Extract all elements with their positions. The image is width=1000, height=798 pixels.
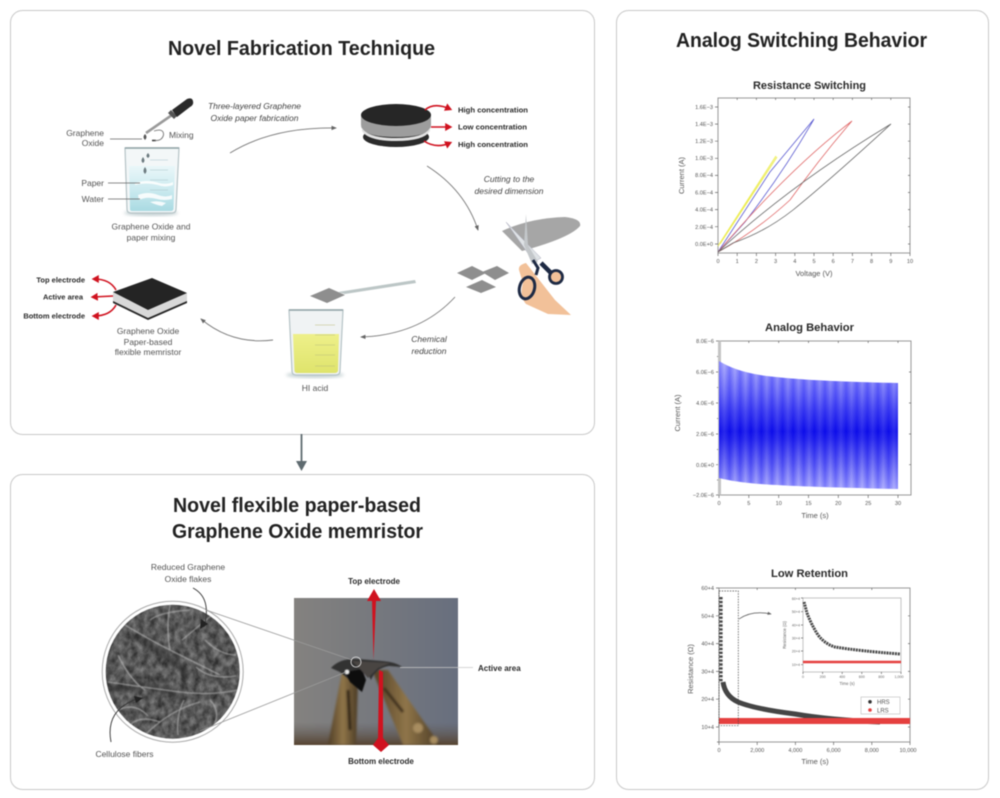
arrows: disc concentration [424,106,450,146]
step label: cutting: desired dimension [475,186,544,196]
step label: cutting [475,174,544,196]
caption: HI acid: HI acid [302,383,328,393]
inset y labels: 20+4 [792,650,800,654]
panel: fabrication technique [10,10,594,434]
legend: HRS [877,700,890,706]
icon: tweezers with square [310,280,416,303]
axis labels [673,394,829,520]
x tick labels: 3 [774,259,777,265]
caption: mixing [112,222,191,242]
caption: memristor: flexible memristor [115,347,181,357]
x tick labels: 20 [835,501,841,507]
labels: concentration: High concentration [458,140,528,149]
chart: analog behavior [673,322,911,520]
axis labels: Current (A) [677,156,686,194]
inset y labels: 60+4 [792,597,800,601]
labels: beaker callouts: Water [82,194,104,204]
inset chart [782,597,904,686]
zoom region box [719,591,738,726]
photo: device on clips [294,598,458,745]
x tick labels [717,501,901,507]
y tick labels: −2.0E−6 [693,493,714,499]
x tick labels: 15 [805,501,812,507]
arrows: memristor layers [93,279,116,316]
arrow: panel connector [296,434,307,471]
y tick labels [701,586,714,731]
inset x labels: 0 [802,675,804,679]
y tick labels: 6.0E−4 [695,190,713,196]
inset x labels: 1,000 [894,675,904,679]
inset y labels: 40+4 [792,624,800,628]
callout: zoom guide lines [200,610,361,731]
step label: reduction: Chemical [411,334,448,344]
x tick labels: 10 [907,259,913,265]
label: cellulose fibers: Cellulose fibers [95,749,154,759]
x tick labels: 30 [895,501,901,507]
x tick labels: 7 [851,259,854,265]
inset x labels: 600 [859,675,865,679]
icon: memristor layers [113,278,187,320]
title: memristor: Graphene Oxide memristor [172,521,423,543]
labels: beaker callouts: Graphene [66,128,104,138]
labels: beaker callouts: Oxide [82,138,104,148]
panel: flexible memristor [10,474,594,790]
x tick labels: 8 [870,259,873,265]
y tick labels: 1.2E−3 [695,139,713,145]
y tick labels: 50+4 [701,614,714,620]
y tick labels: 2.0E−6 [696,432,714,438]
inset x labels [802,675,904,679]
y tick labels [695,105,713,248]
y tick labels: 0.0E+0 [696,463,714,469]
chart: low retention [686,568,917,766]
step label: three-layered fabrication [208,101,301,123]
y tick labels: 0.0E+0 [695,242,713,248]
inset x labels: 400 [839,675,845,679]
y tick labels: 1.4E−3 [695,122,713,128]
y tick labels: 60+4 [701,586,714,592]
title: analog switching: Analog Switching Behavior [676,30,927,52]
plot frame and ticks [715,98,910,256]
labels: beaker callouts: Paper [81,178,104,188]
label: bottom electrode: Bottom electrode [348,757,414,766]
step label: cutting: Cutting to the [484,174,535,184]
inset x labels: 800 [878,675,884,679]
caption: memristor: Graphene Oxide [117,326,179,336]
y tick labels: 4.0E−4 [695,208,713,214]
arrow: top electrode [367,589,381,660]
labels: beaker callouts: Mixing [169,130,194,140]
axis labels: Current (A) [673,394,682,432]
y tick labels: 2.0E−4 [695,225,713,231]
label: reduced graphene oxide flakes: Reduced Graphene [151,562,225,572]
icon: HI acid beaker [286,310,344,378]
inset y labels: 10+4 [792,663,800,667]
chart title: Resistance Switching [753,80,866,92]
inset axis labels: Time (s) [839,681,855,686]
y tick labels: 40+4 [701,642,714,648]
y tick labels [693,339,714,499]
blue current band [718,341,898,495]
chart title: Analog Behavior [765,322,855,334]
x tick labels: 4,000 [788,748,802,754]
x tick labels: 10,000 [899,748,917,754]
caption: memristor: Paper-based [124,337,173,347]
x tick labels: 4 [793,259,796,265]
caption: memristor [115,326,181,357]
curves [718,119,891,252]
inset y labels: 50+4 [792,610,800,614]
icon: scissors and hand [502,214,580,315]
x tick labels: 9 [889,259,892,265]
x tick labels [716,259,913,265]
y tick labels: 4.0E−6 [696,401,714,407]
y tick labels: 8.0E−6 [696,339,714,345]
x tick labels: 0 [717,748,721,754]
caption: mixing: Graphene Oxide and [112,222,191,232]
axis labels [686,644,829,766]
y tick labels: 8.0E−4 [695,173,713,179]
axis labels: Resistance (Ω) [686,644,695,694]
caption: mixing: paper mixing [127,232,176,242]
labels: concentration [458,106,528,149]
title: memristor [172,495,423,543]
plot frame and ticks [716,588,910,745]
icon: cut squares [457,266,509,293]
step label: three-layered fabrication: Oxide paper fabrication [211,113,299,123]
label: reduced graphene oxide flakes [151,562,225,629]
legend [861,697,900,714]
x tick labels: 5 [812,259,816,265]
series: HRS and LRS [719,597,910,722]
arrow: to cutting [427,166,478,230]
x tick labels: 0 [716,259,720,265]
label: cellulose fibers [95,696,154,759]
axis labels [677,156,833,278]
y tick labels: 10+4 [701,725,714,731]
x tick labels: 6 [832,259,835,265]
x tick labels: 1 [736,259,739,265]
labels: memristor layers: Active area [43,292,84,302]
panel: analog switching [616,10,988,790]
arrow: zoom to inset [739,613,771,619]
y tick labels: 1.0E−3 [695,156,713,162]
arrow: to three-layer disc [230,128,336,153]
inset y labels: 30+4 [792,636,800,640]
arrow: to memristor [201,319,273,341]
label: active area [400,664,521,673]
axis labels: Time (s) [801,757,829,766]
micrograph: SEM circle [102,601,243,742]
step label: reduction [411,334,448,356]
x tick labels: 0 [717,501,721,507]
x tick labels: 8,000 [865,748,879,754]
inset series [803,602,901,662]
y tick labels: 20+4 [701,697,714,703]
labels: concentration: Low concentration [458,122,527,132]
chart: resistance switching [677,80,913,278]
arrow: to acid [361,297,455,337]
chart title: Low Retention [771,568,848,580]
y tick labels: 30+4 [701,670,714,676]
plot frame and ticks [716,341,911,498]
legend: LRS [877,708,889,714]
label: active area: Active area [478,664,521,673]
y tick labels: 1.6E−3 [695,105,713,111]
inset y labels [792,597,800,667]
labels: concentration: High concentration [458,106,528,114]
labels: beaker callouts [66,128,194,204]
x tick labels: 10 [776,501,782,507]
label: reduced graphene oxide flakes: Oxide flakes [165,574,211,584]
labels: memristor layers: Top electrode [36,276,85,284]
label: top electrode: Top electrode [348,577,400,586]
x tick labels: 5 [747,501,750,507]
icon: three-layer disc [361,104,431,147]
inset axis labels [782,621,855,686]
step label: three-layered fabrication: Three-layered Graphene [208,101,301,111]
labels: memristor layers [23,276,85,320]
axis labels: Time (s) [801,511,829,520]
step label: reduction: reduction [412,346,447,356]
x tick labels: 6,000 [827,748,841,754]
arrow: bottom electrode [373,670,389,752]
title: fabrication: Novel Fabrication Technique [168,38,435,60]
labels: memristor layers: Bottom electrode [23,312,85,320]
axis labels: Voltage (V) [795,269,833,278]
inset axis labels: Resistance (Ω) [782,621,787,649]
x tick labels [717,748,917,754]
title: memristor: Novel flexible paper-based [173,495,421,517]
x tick labels: 2,000 [750,748,764,754]
x tick labels: 2 [755,259,758,265]
y tick labels: 6.0E−6 [696,370,714,376]
x tick labels: 25 [865,501,871,507]
icon: beaker with dropper [124,98,193,216]
inset x labels: 200 [820,675,826,679]
